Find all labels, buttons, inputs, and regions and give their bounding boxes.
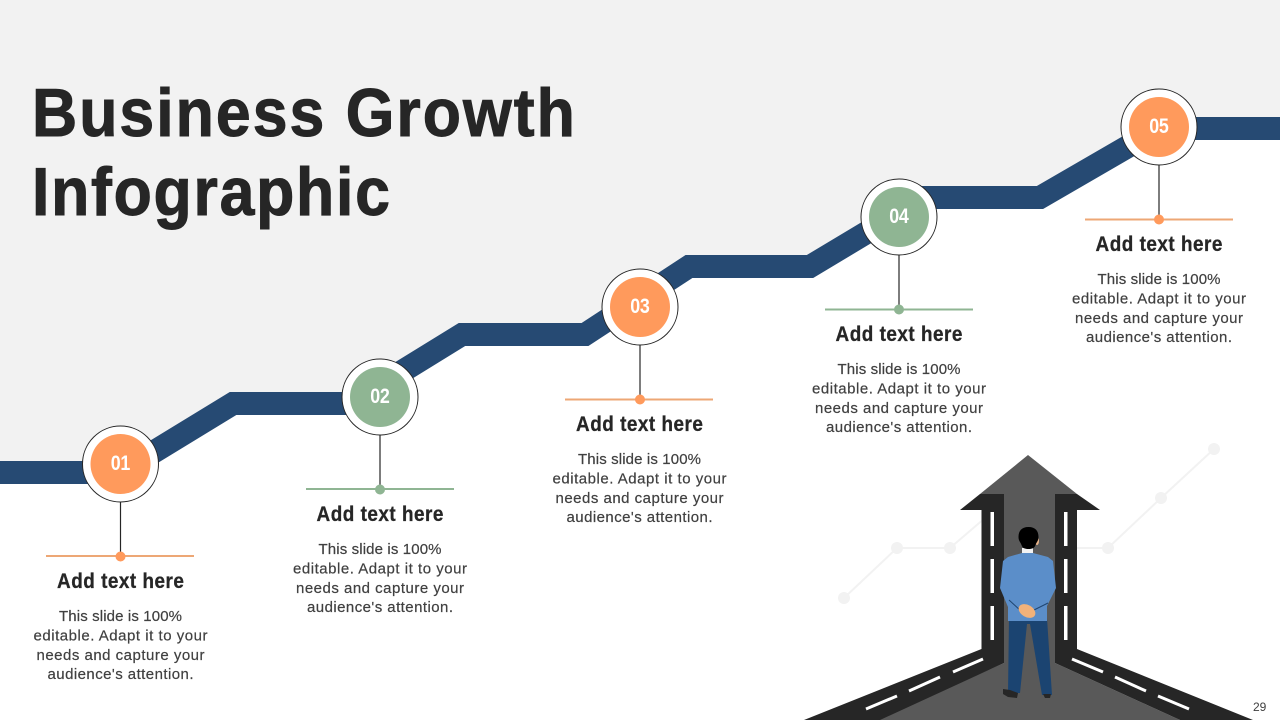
step 02: 02: [370, 385, 390, 408]
step 05: audience's attention.: [1086, 329, 1232, 346]
step 02: [293, 359, 467, 616]
step 04: This slide is 100%: [838, 361, 960, 378]
step 03: [552, 269, 726, 526]
businessman seen from behind: [1000, 527, 1056, 698]
step 03: Add text here: [576, 413, 703, 436]
step 04: Add text here: [836, 323, 962, 346]
road arrow illustration: [804, 455, 1253, 720]
step 01: needs and capture your: [36, 647, 204, 664]
faint background line chart: [838, 443, 1220, 604]
step 03: This slide is 100%: [578, 451, 701, 468]
step 05: Add text here: [1096, 233, 1222, 256]
step 04: needs and capture your: [815, 400, 983, 417]
title: Infographic: [32, 154, 390, 230]
step 02: needs and capture your: [296, 580, 464, 597]
step 04: editable. Adapt it to your: [812, 380, 986, 398]
step 03: needs and capture your: [556, 490, 724, 507]
step 04: 04: [889, 205, 909, 228]
step 02: Add text here: [317, 503, 443, 526]
step 02: audience's attention.: [307, 599, 453, 616]
step 05: 05: [1149, 115, 1169, 138]
grey header background: [0, 0, 1280, 472]
step 05: [1072, 89, 1246, 346]
title: [32, 75, 575, 230]
growth path: [0, 128, 1280, 472]
step 05: This slide is 100%: [1098, 271, 1220, 288]
step 04: [812, 179, 986, 436]
step 03: 03: [630, 295, 650, 318]
step 04: audience's attention.: [826, 419, 972, 436]
step 01: 01: [111, 452, 130, 475]
step 01: [34, 426, 208, 683]
title: Business Growth: [32, 75, 575, 151]
step 01: audience's attention.: [48, 666, 194, 683]
step 01: Add text here: [57, 570, 184, 593]
step 03: editable. Adapt it to your: [552, 470, 726, 488]
step 02: editable. Adapt it to your: [293, 560, 467, 578]
step 05: editable. Adapt it to your: [1072, 290, 1246, 308]
step 01: This slide is 100%: [59, 608, 182, 625]
step 03: audience's attention.: [566, 509, 712, 526]
step 02: This slide is 100%: [318, 541, 442, 558]
page number: 29: [1253, 700, 1267, 714]
step 05: needs and capture your: [1075, 310, 1243, 327]
step 01: editable. Adapt it to your: [34, 628, 208, 644]
